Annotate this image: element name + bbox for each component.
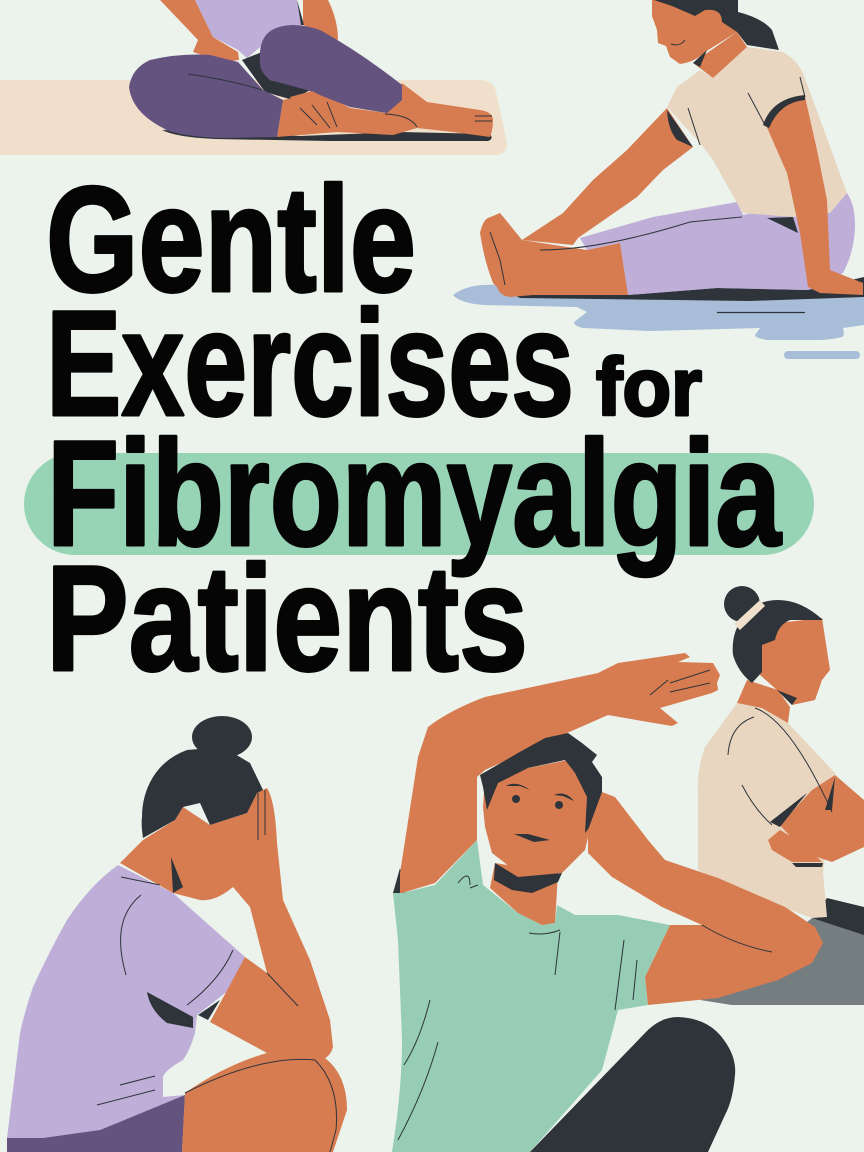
face [652,0,738,64]
hair [733,600,823,683]
knee [182,1053,347,1152]
yoga mat [0,80,507,155]
raised arm and hand [400,653,720,893]
hand and forearm [210,788,333,1060]
hair [480,733,602,833]
illustration: seated cross-legged person on mat [0,0,507,155]
detail lines [398,670,772,1140]
illustration: person with crossed arms [698,586,864,1005]
shirt [667,47,847,217]
neck [693,32,747,78]
illustration: person with hands on face [7,716,347,1152]
hair [654,0,779,50]
title line: Exercises: Exercises [46,279,574,447]
bent arm [588,792,823,1005]
shirt [698,703,835,918]
sleeve bands [770,777,835,867]
hair band [734,600,765,630]
hair [142,747,263,838]
hair bun [192,716,252,758]
water puddle [453,280,864,340]
left arm and hand [160,0,239,62]
title line: Patients: Patients [46,534,528,702]
highlight pill [24,453,814,555]
shirt [392,840,670,1152]
sleeve shadow [147,992,220,1028]
dark sleeve lining [667,110,693,147]
illustration: seated forward bend person [453,0,864,359]
face details [506,784,574,842]
collar [494,863,562,893]
floor shadow [162,130,492,141]
neck and face [120,807,247,900]
dark waistband [767,217,798,233]
grey leggings [700,918,864,1005]
dark neck shadow [171,857,183,893]
detail lines [97,790,337,1152]
detail lines [490,40,805,285]
neck [737,680,790,723]
title [24,155,814,702]
purple raised knee [260,25,402,113]
folded arm [780,775,864,862]
dark inner shadow [242,52,310,100]
title line: Gentle: Gentle [46,155,416,323]
leg and feet [480,213,628,297]
hand on ankle [290,91,345,130]
neck [490,863,558,925]
title word: for: for [596,342,702,433]
leggings [580,193,855,295]
detail lines [188,74,492,128]
lower leg and feet [277,83,493,137]
purple near thigh [129,55,283,138]
torso [195,0,304,58]
shirt [7,865,245,1140]
back arm [522,108,693,245]
face [760,618,830,705]
illustration: person stretching arm overhead [392,653,823,1152]
dark pants [812,898,864,937]
face [483,760,592,873]
floor shadow [497,277,864,301]
dark shoulder lining [393,868,405,893]
hand under arm [768,830,822,862]
right arm [303,0,338,40]
shorts [7,1095,185,1152]
sleeve band [763,95,805,128]
detail lines [728,708,832,825]
dark leg [530,1017,735,1152]
front arm [765,97,863,295]
hair bun [724,586,760,622]
